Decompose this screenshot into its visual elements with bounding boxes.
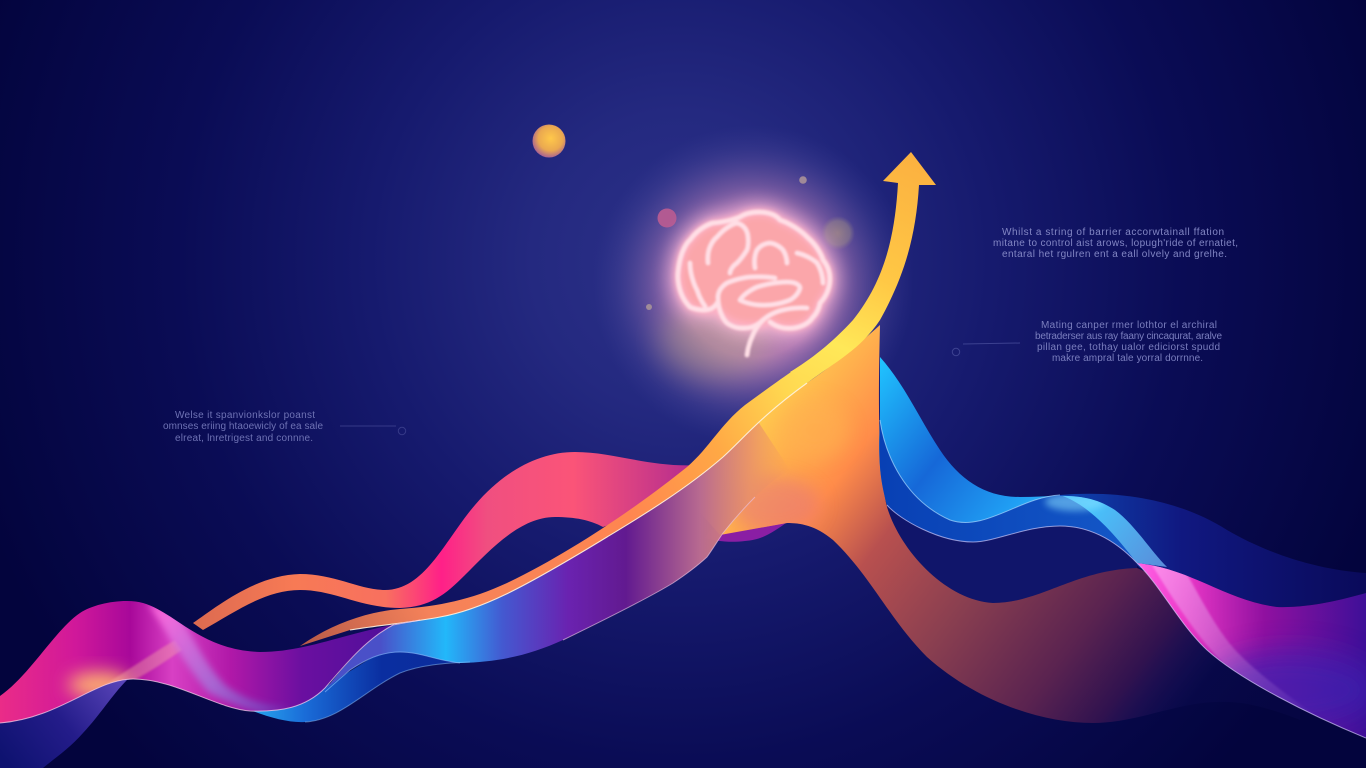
ribbon: pink upper wave [193, 452, 700, 630]
text block: left: elreat, lnretrigest and connne. [175, 433, 313, 444]
text block: middle right [1035, 320, 1222, 364]
ribbon: lower-left blue wave [0, 679, 133, 768]
callout marker: left leader line [340, 426, 406, 435]
text block: upper right [993, 227, 1238, 260]
text block: upper right: entaral het rgulren ent a eall olvely and grelhe. [1002, 249, 1227, 260]
text block: left: Welse it spanvionkslor poanst [175, 410, 315, 421]
icon: rising arrow [790, 152, 936, 383]
ribbon: purple right wave [1137, 562, 1366, 738]
callout marker: right leader line [952, 343, 1020, 356]
ribbon: navy fold under blue wave [880, 470, 1137, 603]
text block: upper right: mitane to control aist arows, lopugh'ride of ernatiet, [993, 238, 1238, 249]
ribbon: right dark blue back wave [1060, 494, 1366, 607]
floating orb: pink [658, 208, 676, 228]
floating orb: faint olive glow [821, 216, 855, 250]
ribbon: magenta left wave [0, 601, 420, 723]
text block: middle right: Mating canper rmer lothtor el archiral [1041, 320, 1217, 331]
floating orb: large orange [532, 124, 566, 158]
ribbon: blue right wave with fine contour lines [879, 357, 1366, 738]
ribbon: orange to yellow rising band [300, 340, 840, 646]
ribbon: purple strip behind flare [705, 520, 790, 542]
ribbon: orange flare fading to brown [717, 325, 1208, 723]
floating orb: small grey [646, 304, 652, 310]
icon: glowing brain [678, 212, 830, 355]
ribbon: dark blue lower band, left [250, 640, 480, 722]
text block: middle right: betraderser aus ray faany cincaqurat, aralve [1035, 331, 1222, 342]
text block: middle right: pillan gee, tothay ualor ediciorst spudd [1037, 342, 1220, 353]
brain glow halo [593, 125, 913, 445]
text block: left [163, 410, 323, 444]
text block: middle right: makre ampral tale yorral dorrnne. [1052, 353, 1203, 364]
text block: upper right: Whilst a string of barrier accorwtainall ffation [1002, 227, 1224, 238]
floating orb: small tan [799, 176, 807, 184]
text block: left: omnses eriing htaoewicly of ea sale [163, 421, 323, 432]
ribbon: blue to violet main band [305, 420, 790, 722]
